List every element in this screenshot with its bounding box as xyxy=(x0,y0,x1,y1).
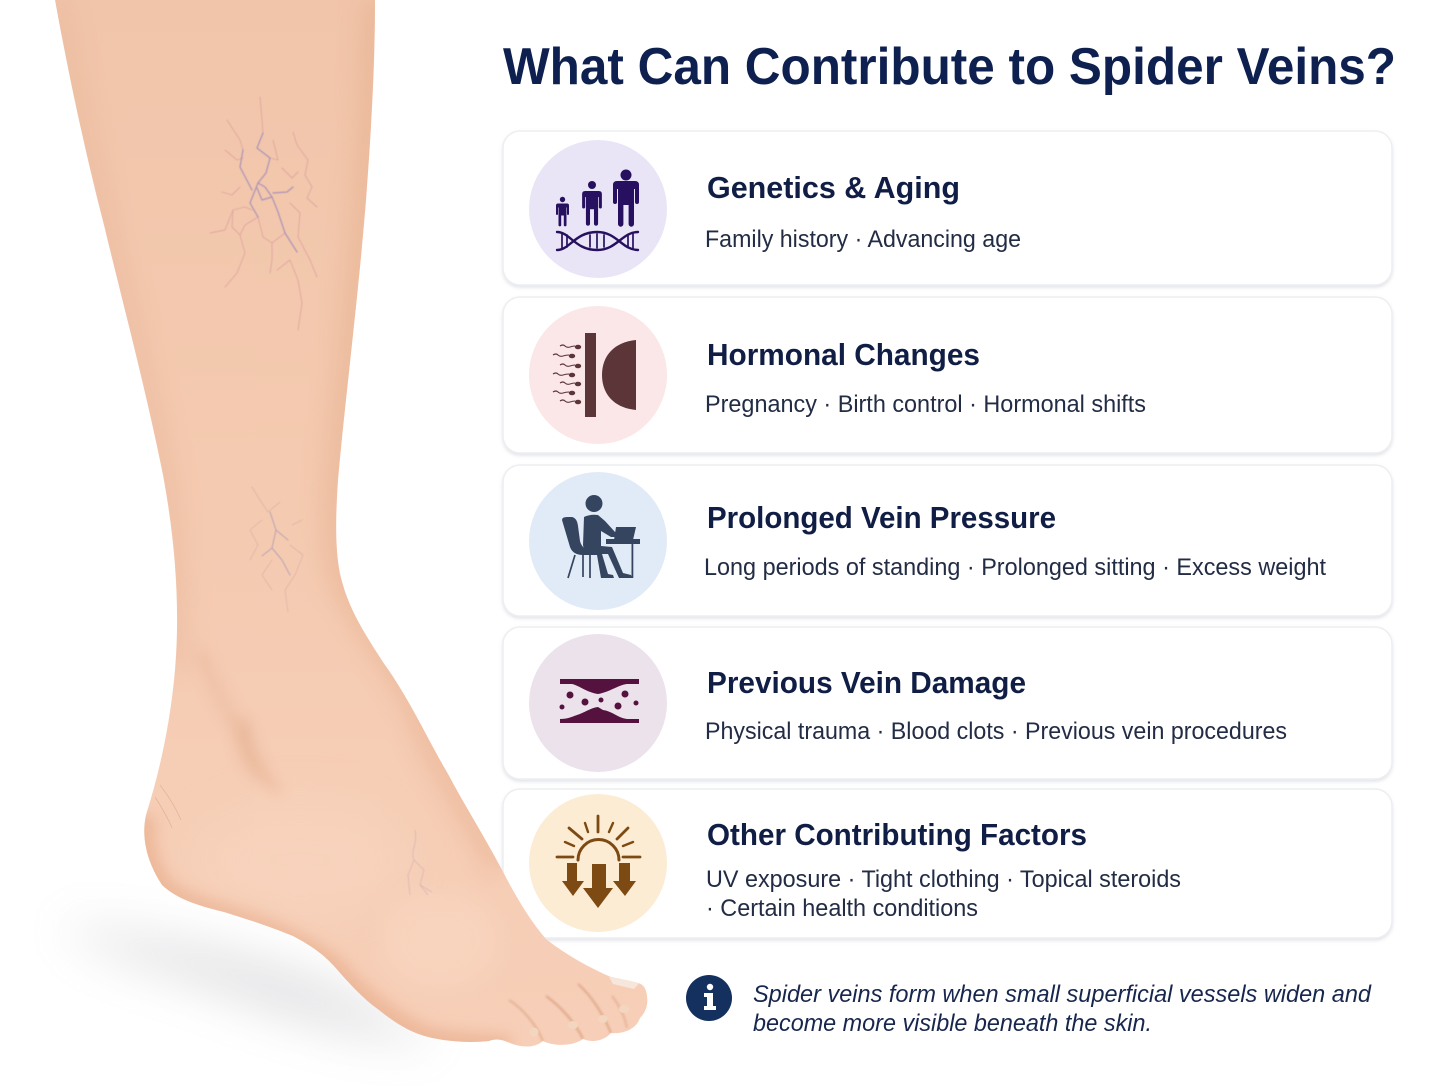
heading: damage: Previous Vein Damage xyxy=(707,665,1026,700)
spider veins: foot xyxy=(408,830,432,895)
icon: info xyxy=(686,975,732,1021)
card: hormonal changes xyxy=(503,297,1392,453)
icon: sun and down arrows xyxy=(557,816,640,908)
card: genetics and aging xyxy=(503,131,1392,285)
spider veins: upper calf xyxy=(210,97,317,330)
description: damage: Physical trauma · Blood clots · Previous vein procedures xyxy=(705,718,1287,745)
description: genetics: Family history · Advancing age xyxy=(705,226,1021,253)
skin shading xyxy=(55,0,510,1046)
spider veins: mid calf xyxy=(250,487,303,612)
note text: become more visible beneath the skin. xyxy=(753,1010,1152,1037)
leg illustration xyxy=(55,0,648,1046)
description: other: · Certain health conditions xyxy=(706,895,978,922)
description: pressure: Long periods of standing · Prolonged sitting · Excess weight xyxy=(704,554,1326,581)
description: other: UV exposure · Tight clothing · Topical steroids xyxy=(706,866,1181,893)
icon: people and DNA xyxy=(556,170,639,250)
note text xyxy=(753,981,1372,1037)
note: spider vein definition xyxy=(686,975,1372,1037)
foot shadow xyxy=(60,925,440,1041)
card: other contributing factors xyxy=(503,789,1392,938)
toes xyxy=(509,977,640,1041)
heading: hormonal: Hormonal Changes xyxy=(707,337,980,372)
card: previous vein damage xyxy=(503,627,1392,779)
description: hormonal: Pregnancy · Birth control · Hormonal shifts xyxy=(705,391,1146,418)
icon: person sitting at desk xyxy=(562,495,640,578)
heading: pressure: Prolonged Vein Pressure xyxy=(707,500,1056,535)
heading: other: Other Contributing Factors xyxy=(707,817,1087,852)
note text: Spider veins form when small superficial vessels widen and xyxy=(753,981,1372,1008)
title: What Can Contribute to Spider Veins? xyxy=(503,38,1396,96)
description: other xyxy=(706,866,1181,922)
heel creases xyxy=(155,785,181,828)
card: prolonged vein pressure xyxy=(503,465,1392,616)
heading: genetics: Genetics & Aging xyxy=(707,170,960,205)
icon: hormone barrier xyxy=(553,333,636,417)
ankle bone xyxy=(232,721,277,790)
icon: damaged vein xyxy=(560,679,639,723)
